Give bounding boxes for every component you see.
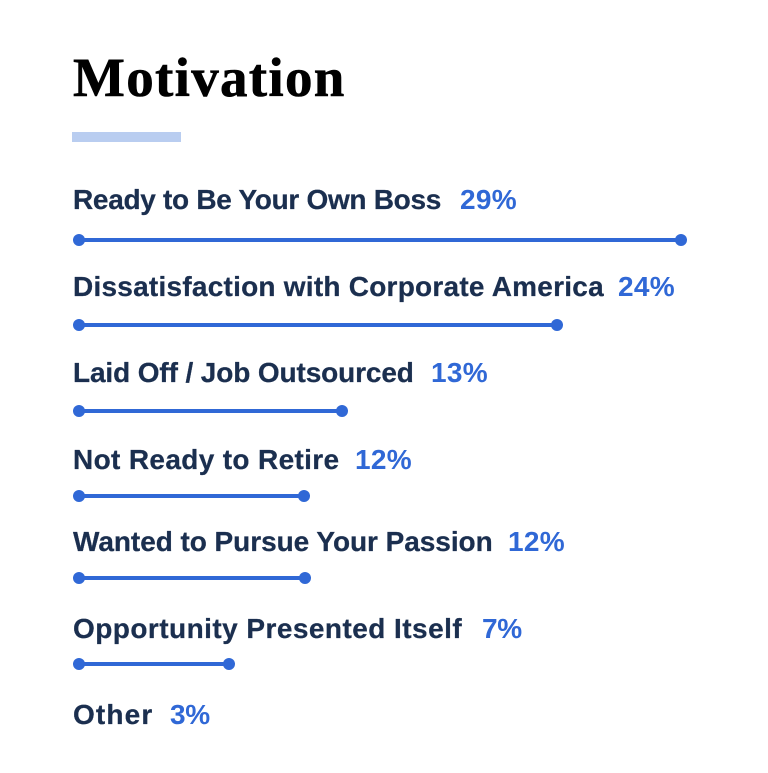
title: Motivation (73, 47, 346, 108)
value: 12%: 12% (355, 444, 412, 475)
value: 3%: 3% (170, 699, 210, 730)
title accent bar (72, 132, 181, 142)
label: Wanted to Pursue Your Passion: Wanted to Pursue Your Passion (73, 526, 493, 557)
value: 12%: 12% (508, 526, 565, 557)
value: 7%: 7% (482, 613, 522, 644)
value: 29%: 29% (460, 184, 517, 215)
value: 24%: 24% (618, 271, 675, 302)
bar: 12% (73, 490, 310, 502)
label: Opportunity Presented Itself: Opportunity Presented Itself (73, 613, 462, 644)
bar: 29% (73, 234, 687, 246)
bar: 7% (73, 658, 235, 670)
label: Ready to Be Your Own Boss: Ready to Be Your Own Boss (73, 184, 441, 215)
value: 13%: 13% (431, 357, 488, 388)
label: Dissatisfaction with Corporate America: Dissatisfaction with Corporate America (73, 271, 604, 302)
bar: 13% (73, 405, 348, 417)
label: Not Ready to Retire: Not Ready to Retire (73, 444, 339, 475)
label: Laid Off / Job Outsourced: Laid Off / Job Outsourced (73, 357, 414, 388)
bar: 12% (73, 572, 311, 584)
label: Other: Other (73, 699, 153, 730)
bar: 24% (73, 319, 563, 331)
